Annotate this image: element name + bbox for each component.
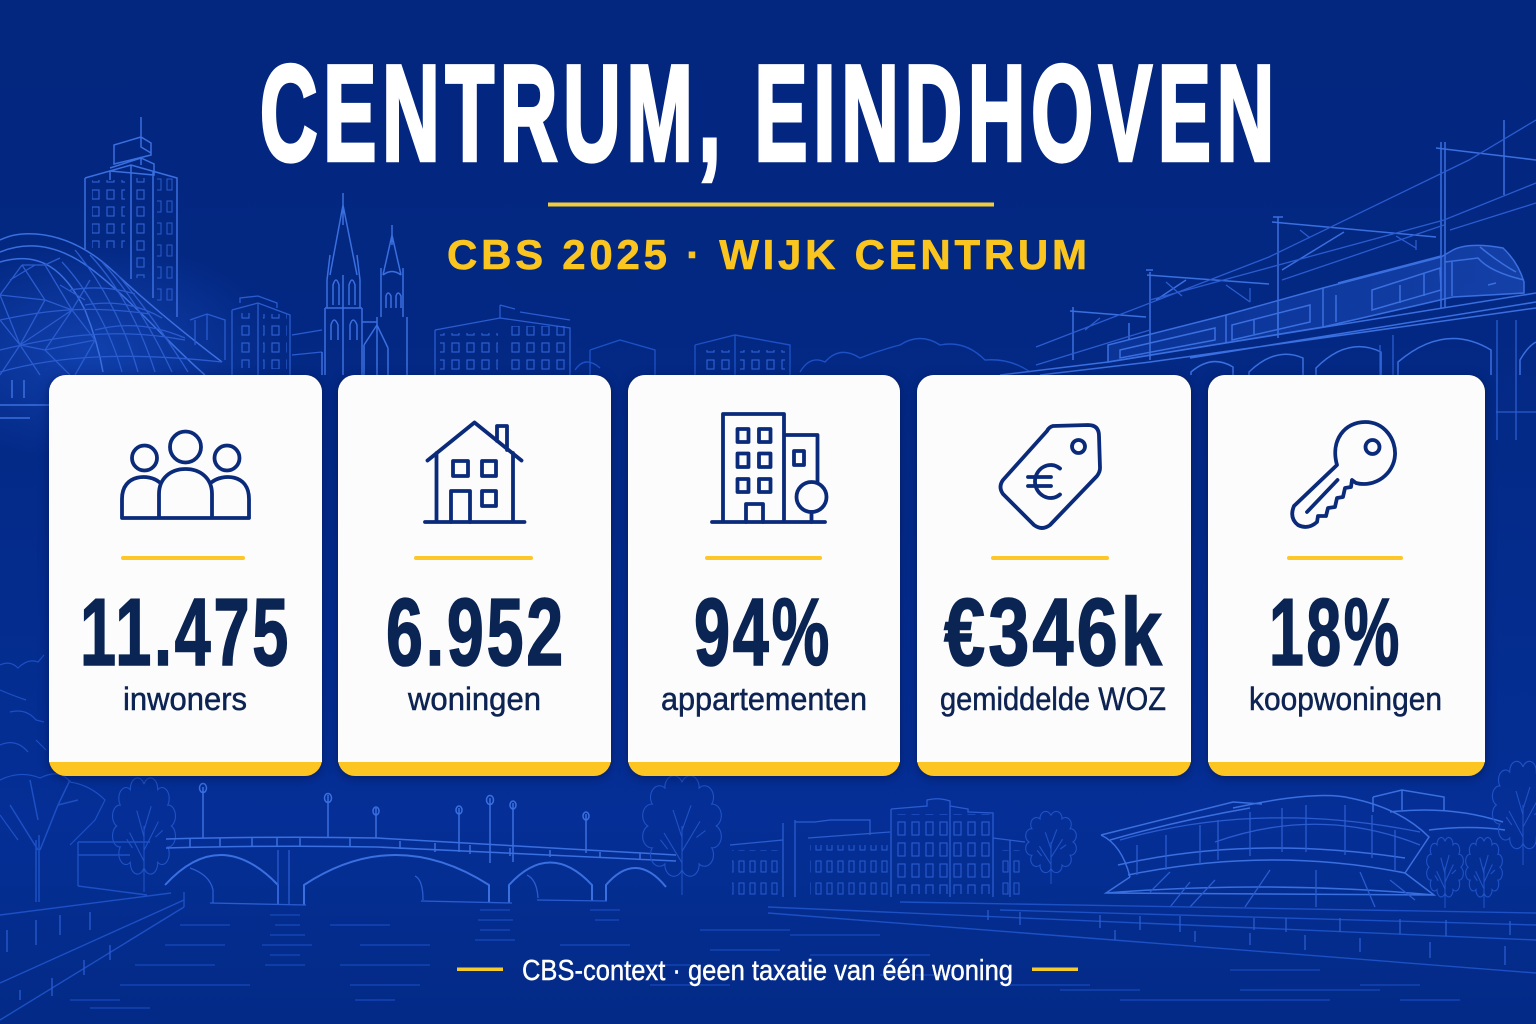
railway viaduct — [1000, 293, 1536, 440]
divider — [991, 556, 1109, 560]
footer dash left — [457, 968, 503, 971]
divider — [705, 556, 822, 560]
tree beside city block — [1026, 811, 1076, 884]
quay left — [0, 842, 184, 1020]
card: inwoners — [49, 375, 322, 776]
overhead catenary — [1036, 120, 1536, 365]
card: appartementen — [628, 375, 900, 776]
icon: people — [122, 432, 249, 518]
city block — [730, 799, 1025, 897]
subtitle: CBS 2025 · WIJK CENTRUM — [447, 231, 1087, 278]
divider — [414, 556, 533, 560]
icon: house — [425, 422, 524, 522]
label: woningen — [407, 681, 541, 717]
tree beside bridge — [113, 778, 175, 892]
tree at bridge end — [643, 776, 721, 895]
skyline: tower — [85, 117, 177, 317]
card: woningen — [338, 375, 611, 776]
trees beside convention building — [1427, 837, 1463, 908]
train — [1108, 245, 1524, 362]
footer dash right — [1032, 968, 1078, 971]
value: 18% — [1269, 579, 1402, 686]
river bridge — [165, 784, 676, 905]
card background — [1208, 375, 1485, 776]
skyline: dome — [0, 234, 222, 418]
label: koopwoningen — [1249, 681, 1442, 717]
skyline: central buildings — [435, 305, 1030, 375]
quay right — [768, 902, 1536, 973]
card background — [628, 375, 900, 776]
skyline: church towers — [322, 193, 407, 375]
card background — [917, 375, 1191, 776]
label: inwoners — [123, 681, 247, 717]
convention building — [1101, 790, 1505, 907]
icon: key — [1292, 422, 1395, 527]
card: koopwoningen — [1208, 375, 1485, 776]
value: 11.475 — [80, 579, 291, 686]
skyline: low buildings left — [190, 296, 322, 375]
divider — [121, 556, 245, 560]
bottom left tree — [0, 655, 105, 902]
icon: apartment building — [712, 414, 826, 522]
skyline: glow behind dome — [0, 240, 280, 460]
footer note — [457, 955, 1078, 987]
title divider — [548, 202, 994, 206]
river water reflections — [70, 910, 1460, 1008]
card background — [338, 375, 611, 776]
icon: euro price tag — [1000, 425, 1100, 528]
value: 6.952 — [386, 579, 566, 686]
value: €346k — [944, 579, 1165, 686]
card: gemiddelde WOZ — [917, 375, 1191, 776]
card background — [49, 375, 322, 776]
footer text: CBS-context · geen taxatie van één woning — [522, 955, 1013, 987]
label: appartementen — [661, 681, 867, 717]
divider — [1287, 556, 1403, 560]
value: 94% — [694, 579, 832, 686]
label: gemiddelde WOZ — [940, 681, 1166, 717]
